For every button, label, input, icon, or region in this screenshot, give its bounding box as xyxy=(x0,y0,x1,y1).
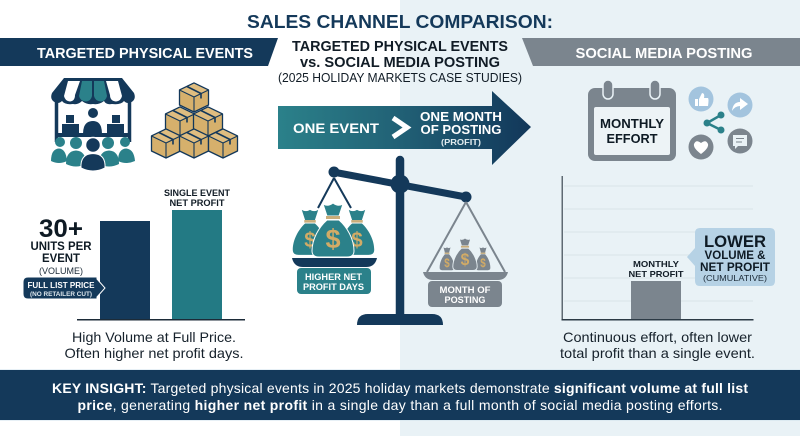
stat: 30+ units per event: EVENT xyxy=(42,251,81,265)
stat: 30+ units per event: 30+ xyxy=(39,215,83,243)
stat: 30+ units per event: UNITS PER xyxy=(30,239,92,253)
right banner heading: SOCIAL MEDIA POSTING xyxy=(576,45,752,62)
icon: monthly effort calendar xyxy=(588,80,676,161)
key insight band: price, generating higher net profit in a single day than a full month of social media posting efforts. xyxy=(78,397,722,413)
icon: market stall with crowd xyxy=(51,78,135,171)
callout: lower volume and net profit: (CUMULATIVE) xyxy=(703,273,767,283)
right pan with money bags: $ xyxy=(444,257,450,270)
callout: lower volume and net profit: LOWER xyxy=(704,232,766,251)
right pan with money bags: $ xyxy=(480,257,486,270)
callout: lower volume and net profit: VOLUME & xyxy=(704,250,766,262)
label: single event net profit: NET PROFIT xyxy=(170,198,225,209)
text: left caption: Often higher net profit days. xyxy=(64,345,244,361)
scale stand and beam xyxy=(328,160,472,325)
stat: 30+ units per event: (VOLUME) xyxy=(39,266,83,277)
callout: full list price xyxy=(23,277,105,299)
label: higher net profit days: PROFIT DAYS xyxy=(303,282,364,293)
icon: social media reactions xyxy=(688,86,752,160)
key insight band: KEY INSIGHT: Targeted physical events in 2025 holiday markets demonstrate significant volume at full list xyxy=(52,380,748,396)
text: right caption xyxy=(560,329,755,361)
label: single event net profit xyxy=(164,188,230,209)
label: month of posting: MONTH OF xyxy=(440,285,491,296)
left pan with money bags: $ xyxy=(304,229,316,252)
text: right caption: total profit than a single event. xyxy=(560,345,755,361)
right pan with money bags: $ xyxy=(461,252,469,269)
icon: monthly effort calendar: MONTHLY xyxy=(600,117,665,131)
right banner heading xyxy=(522,38,800,66)
text: left caption xyxy=(64,329,244,361)
callout: full list price: (NO RETAILER CUT) xyxy=(30,292,92,298)
key insight band xyxy=(0,370,800,420)
panel: right background xyxy=(400,0,800,436)
title: SALES CHANNEL COMPARISON: xyxy=(247,12,553,32)
icon: stacked boxes xyxy=(152,83,238,158)
subtitle: (2025 HOLIDAY MARKETS CASE STUDIES) xyxy=(278,70,522,85)
left banner heading: TARGETED PHYSICAL EVENTS xyxy=(37,45,253,62)
callout: lower volume and net profit: NET PROFIT xyxy=(700,262,770,274)
arrow: one event greater than one month xyxy=(278,91,531,165)
text: right caption: Continuous effort, often lower xyxy=(563,329,752,345)
chart: balance scale xyxy=(292,160,508,325)
label: single event net profit: SINGLE EVENT xyxy=(164,188,230,199)
right pan with money bags xyxy=(423,202,508,280)
bar chart: physical events xyxy=(77,188,245,320)
label: monthly net profit: MONTHLY xyxy=(633,259,679,269)
bar chart: social media xyxy=(562,176,754,320)
icon: monthly effort calendar: EFFORT xyxy=(606,132,658,146)
text: left caption: High Volume at Full Price. xyxy=(72,329,236,345)
left pan with money bags: $ xyxy=(351,229,363,252)
subtitle xyxy=(278,38,522,85)
left pan with money bags xyxy=(292,178,377,267)
label: month of posting xyxy=(428,281,502,307)
label: higher net profit days xyxy=(297,268,371,294)
callout: lower volume and net profit xyxy=(687,228,775,286)
label: monthly net profit: NET PROFIT xyxy=(628,269,684,279)
arrow: one event greater than one month: (PROFIT) xyxy=(441,138,481,147)
left banner heading xyxy=(0,38,278,66)
subtitle: TARGETED PHYSICAL EVENTS xyxy=(292,38,508,55)
arrow: one event greater than one month: ONE MONTH xyxy=(420,109,502,124)
label: month of posting: POSTING xyxy=(444,295,486,306)
left pan with money bags: $ xyxy=(325,224,341,254)
label: monthly net profit xyxy=(628,259,684,279)
subtitle: vs. SOCIAL MEDIA POSTING xyxy=(300,54,500,71)
arrow: one event greater than one month: ONE EVENT xyxy=(293,120,379,136)
callout: full list price: FULL LIST PRICE xyxy=(28,281,95,290)
stat: 30+ units per event xyxy=(30,215,92,277)
arrow: one event greater than one month: OF POSTING xyxy=(420,122,502,137)
label: higher net profit days: HIGHER NET xyxy=(305,272,362,283)
